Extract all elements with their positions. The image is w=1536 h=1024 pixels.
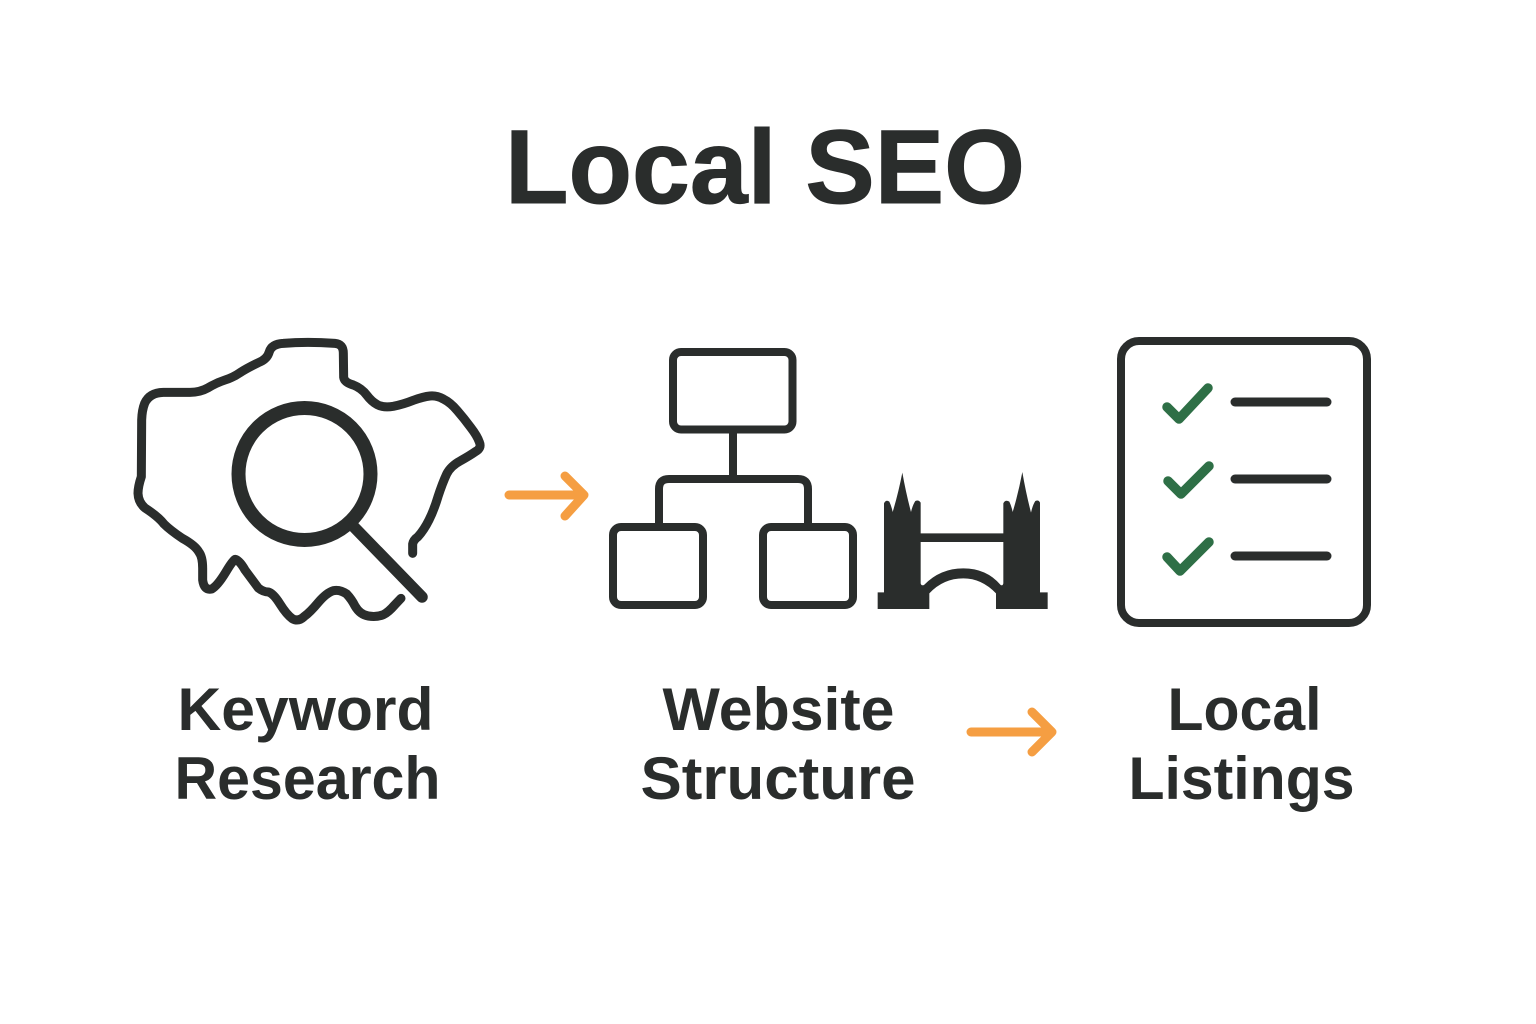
icon: London map with magnifying glass [138, 342, 480, 620]
label: local listings: Listings [1128, 745, 1354, 812]
checklist frame [1121, 341, 1367, 623]
magnifying glass handle [354, 527, 422, 597]
label: website structure [640, 676, 916, 812]
label: website structure: Website [662, 676, 894, 743]
arrow: website structure to local listings [971, 712, 1052, 752]
label: website structure: Structure [640, 745, 916, 812]
title: Local SEO [505, 109, 1025, 226]
label: local listings: Local [1168, 676, 1322, 743]
icon: Tower Bridge [878, 472, 1048, 609]
arrow: keyword research to website structure [509, 476, 584, 516]
magnifying glass lens [238, 408, 370, 540]
tree connectors [659, 430, 808, 525]
left child box [613, 527, 703, 605]
check row 3 [1167, 542, 1327, 571]
label: keyword research: Keyword [178, 676, 434, 743]
top box [673, 352, 792, 430]
right child box [763, 527, 853, 605]
label: keyword research: Research [174, 745, 440, 812]
check row 1 [1167, 388, 1327, 419]
map outline [138, 342, 480, 620]
check row 2 [1168, 466, 1327, 494]
icon: checklist [1121, 341, 1367, 623]
icon: site hierarchy [613, 352, 853, 605]
label: keyword research [174, 676, 440, 812]
label: local listings [1128, 676, 1354, 812]
